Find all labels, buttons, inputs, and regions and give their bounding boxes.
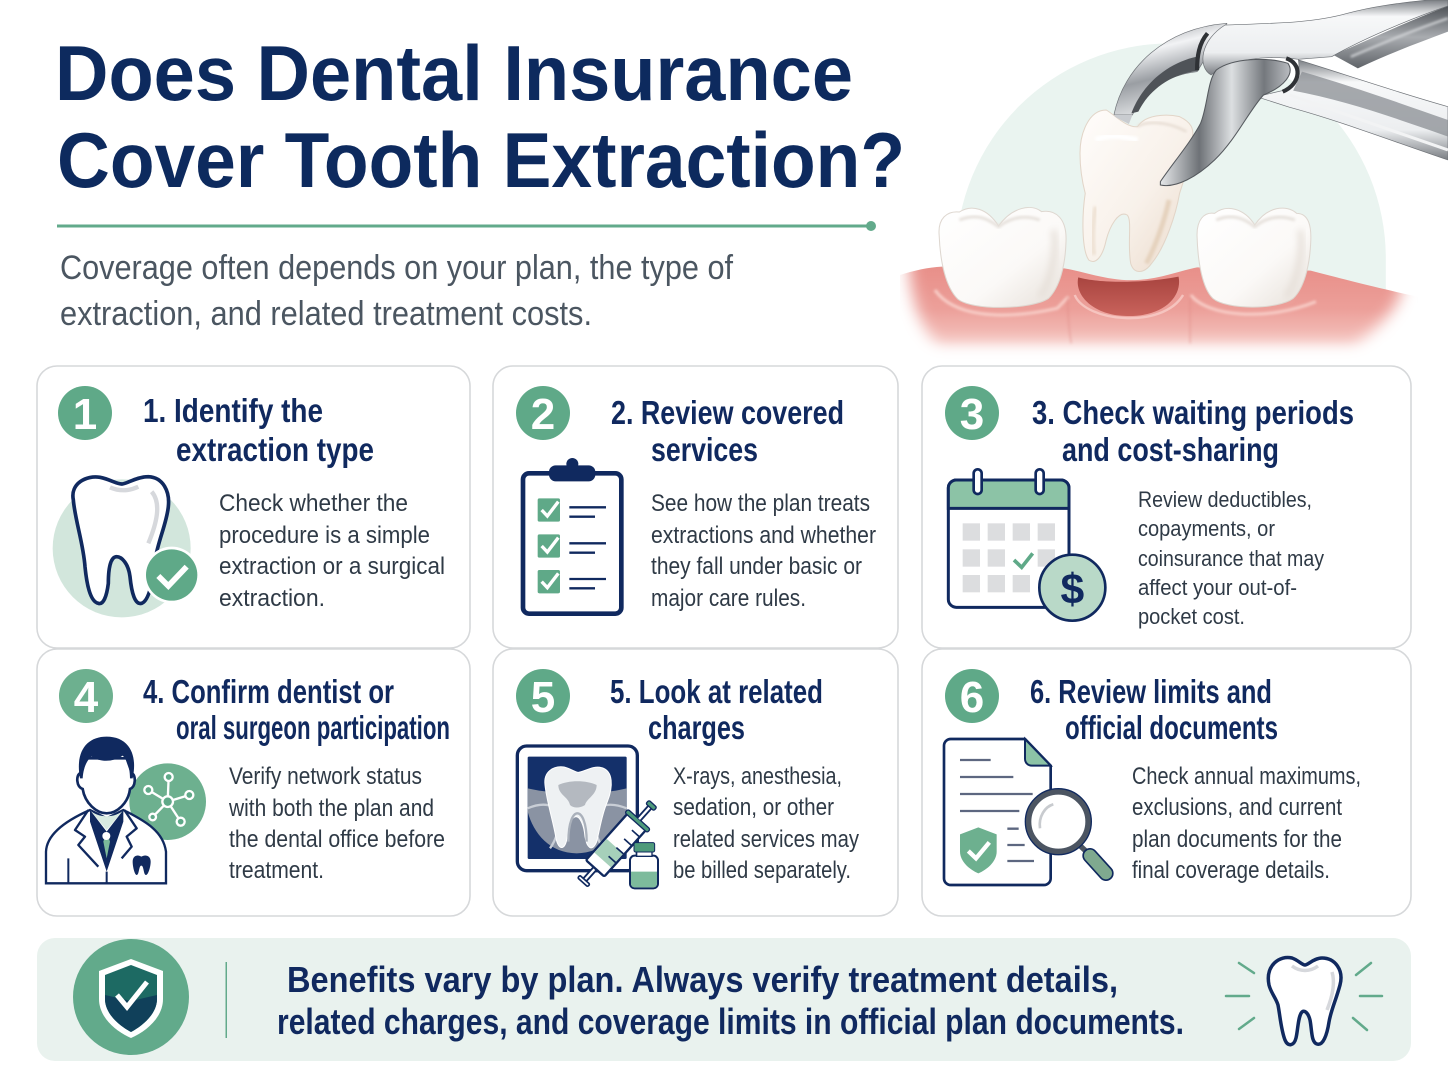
- body text 4: [228, 763, 445, 884]
- card 4: confirm dentist or oral surgeon participation: [37, 649, 470, 916]
- badge 2: 2: [531, 390, 555, 439]
- left tooth: [939, 208, 1066, 307]
- body text 2: [651, 490, 876, 612]
- footer message: [277, 959, 1184, 1042]
- body text 1: procedure is a simple: [219, 522, 430, 549]
- card 3: check waiting periods and cost-sharing: [922, 366, 1411, 648]
- body text 3: pocket cost.: [1138, 604, 1245, 629]
- heading 6: 6. Review limits and: [1030, 673, 1272, 710]
- body text 4: Verify network status: [229, 763, 422, 790]
- body text 4: with both the plan and: [228, 795, 434, 822]
- heading 4: [143, 673, 450, 746]
- heading 6: [1030, 673, 1278, 746]
- forceps upper jaw: [1114, 23, 1227, 115]
- title: Does Dental Insurance: [55, 29, 853, 117]
- footer banner: [37, 938, 1411, 1061]
- icon: x-ray, syringe and vial: [517, 746, 664, 892]
- body text 6: Check annual maximums,: [1132, 763, 1361, 790]
- heading 2: services: [651, 431, 758, 468]
- icon: tooth with check: [53, 477, 200, 617]
- body text 1: extraction.: [219, 585, 325, 612]
- body text 5: [673, 763, 859, 884]
- title: Cover Tooth Extraction?: [57, 116, 905, 204]
- badge 4: [59, 669, 113, 723]
- subtitle: [60, 249, 733, 333]
- body text 3: coinsurance that may: [1138, 546, 1325, 571]
- heading 3: 3. Check waiting periods: [1032, 394, 1354, 431]
- subtitle: Coverage often depends on your plan, the type of: [60, 249, 733, 287]
- body text 4: treatment.: [229, 857, 324, 884]
- body text 2: See how the plan treats: [651, 490, 870, 517]
- heading 3: and cost-sharing: [1062, 431, 1279, 468]
- heading 4: oral surgeon participation: [176, 709, 450, 746]
- badge 1: [58, 386, 112, 440]
- badge 5: [516, 669, 570, 723]
- heading 2: [611, 394, 844, 468]
- body text 6: plan documents for the: [1132, 826, 1342, 853]
- badge 2: [516, 386, 570, 440]
- icon: calendar with dollar coin: $: [1060, 565, 1084, 613]
- forceps lower jaw: [1160, 59, 1290, 186]
- body text 5: X-rays, anesthesia,: [673, 763, 842, 790]
- body text 1: extraction or a surgical: [219, 553, 445, 580]
- body text 5: related services may: [673, 826, 859, 853]
- extracted tooth: [1080, 110, 1193, 271]
- body text 5: be billed separately.: [673, 857, 851, 884]
- body text 5: sedation, or other: [673, 794, 834, 821]
- heading 5: 5. Look at related: [610, 673, 823, 710]
- heading 6: official documents: [1065, 709, 1278, 746]
- footer message: Benefits vary by plan. Always verify treatment details,: [287, 959, 1118, 1000]
- body text 2: they fall under basic or: [651, 553, 862, 580]
- title divider with dot: [57, 221, 876, 231]
- badge 6: [945, 669, 999, 723]
- body text 3: affect your out-of-: [1138, 575, 1297, 600]
- icon: shield in circle: [73, 939, 189, 1055]
- body text 3: copayments, or: [1138, 516, 1275, 541]
- right tooth: [1197, 208, 1311, 307]
- footer message: related charges, and coverage limits in official plan documents.: [277, 1001, 1184, 1042]
- body text 2: major care rules.: [651, 585, 806, 612]
- tooth socket: [1078, 277, 1179, 316]
- subtitle: extraction, and related treatment costs.: [60, 295, 592, 333]
- hero illustration: forceps extracting a tooth: [900, 0, 1448, 360]
- icon: calendar with dollar coin: [948, 469, 1105, 621]
- badge 1: 1: [73, 390, 97, 439]
- icon: document with magnifier: [944, 739, 1106, 885]
- badge 3: 3: [960, 390, 984, 439]
- body text 6: exclusions, and current: [1132, 794, 1342, 821]
- forceps handles: [1333, 6, 1448, 68]
- heading 3: [1032, 394, 1354, 468]
- heading 5: [610, 673, 823, 746]
- icon: dentist with network: [46, 737, 206, 883]
- body text 3: [1138, 487, 1325, 629]
- body text 4: the dental office before: [229, 826, 445, 853]
- body text 3: Review deductibles,: [1138, 487, 1312, 512]
- badge 5: 5: [531, 673, 555, 722]
- card 2: review covered services: [493, 366, 898, 648]
- gum collars: [935, 290, 1316, 315]
- body text 1: Check whether the: [219, 490, 408, 517]
- body text 6: [1132, 763, 1361, 884]
- heading 5: charges: [648, 709, 745, 746]
- heading 4: 4. Confirm dentist or: [143, 673, 394, 710]
- body text 6: final coverage details.: [1132, 857, 1330, 884]
- heading 1: 1. Identify the: [143, 392, 323, 429]
- hero background circle: [956, 43, 1386, 293]
- body text 2: extractions and whether: [651, 522, 876, 549]
- badge 3: [945, 386, 999, 440]
- badge 6: 6: [960, 673, 984, 722]
- gum: [900, 266, 1410, 351]
- card 6: review limits and official documents: [922, 649, 1411, 916]
- heading 1: extraction type: [176, 431, 374, 468]
- badge 4: 4: [74, 673, 99, 722]
- icon: shining tooth: [1226, 957, 1382, 1045]
- heading 2: 2. Review covered: [611, 394, 844, 431]
- heading 1: [143, 392, 374, 468]
- title: [55, 29, 905, 204]
- body text 1: [219, 490, 445, 612]
- card 1: identify the extraction type: [37, 366, 470, 648]
- icon: clipboard checklist: [523, 458, 621, 614]
- card 5: look at related charges: [493, 649, 898, 916]
